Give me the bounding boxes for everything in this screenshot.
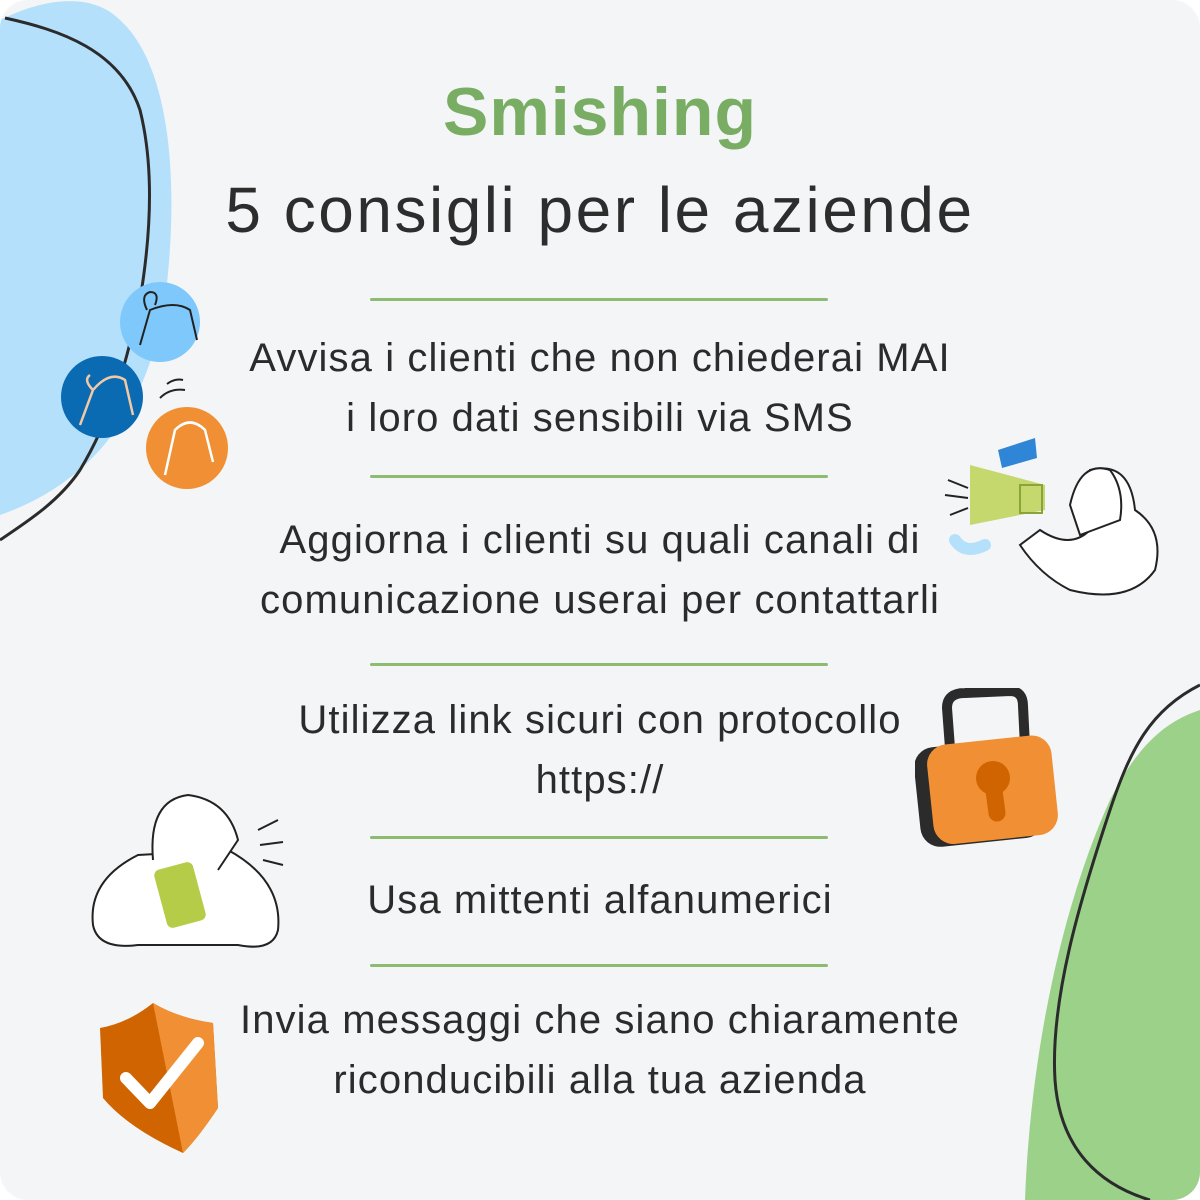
tip 2: comunicazione userai per contattarli (260, 578, 940, 622)
tip 1: i loro dati sensibili via SMS (346, 396, 854, 440)
tip 2: Aggiorna i clienti su quali canali di (279, 518, 921, 562)
decorative blob: blue top-left (0, 1, 172, 542)
tip 1: Avvisa i clienti che non chiederai MAI (249, 336, 951, 380)
icon: person with phone (92, 794, 284, 948)
tip 5: Invia messaggi che siano chiaramente (240, 998, 960, 1042)
decorative blob: green bottom-right (1025, 684, 1200, 1200)
icon: padlock (915, 688, 1058, 847)
tip 2 (260, 518, 940, 622)
icon: people avatars (61, 282, 228, 489)
tip 3: Utilizza link sicuri con protocollo (298, 698, 902, 742)
subtitle: 5 consigli per le aziende (225, 174, 975, 246)
tip 4: Usa mittenti alfanumerici (367, 878, 833, 922)
icon: shield check (100, 1003, 218, 1153)
tip 3: https:// (536, 758, 664, 802)
tip 5 (240, 998, 960, 1102)
tip 1 (249, 336, 951, 440)
tip 5: riconducibili alla tua azienda (333, 1058, 867, 1102)
tip 3 (298, 698, 902, 802)
icon: megaphone person (944, 438, 1158, 596)
title: Smishing (443, 74, 757, 150)
